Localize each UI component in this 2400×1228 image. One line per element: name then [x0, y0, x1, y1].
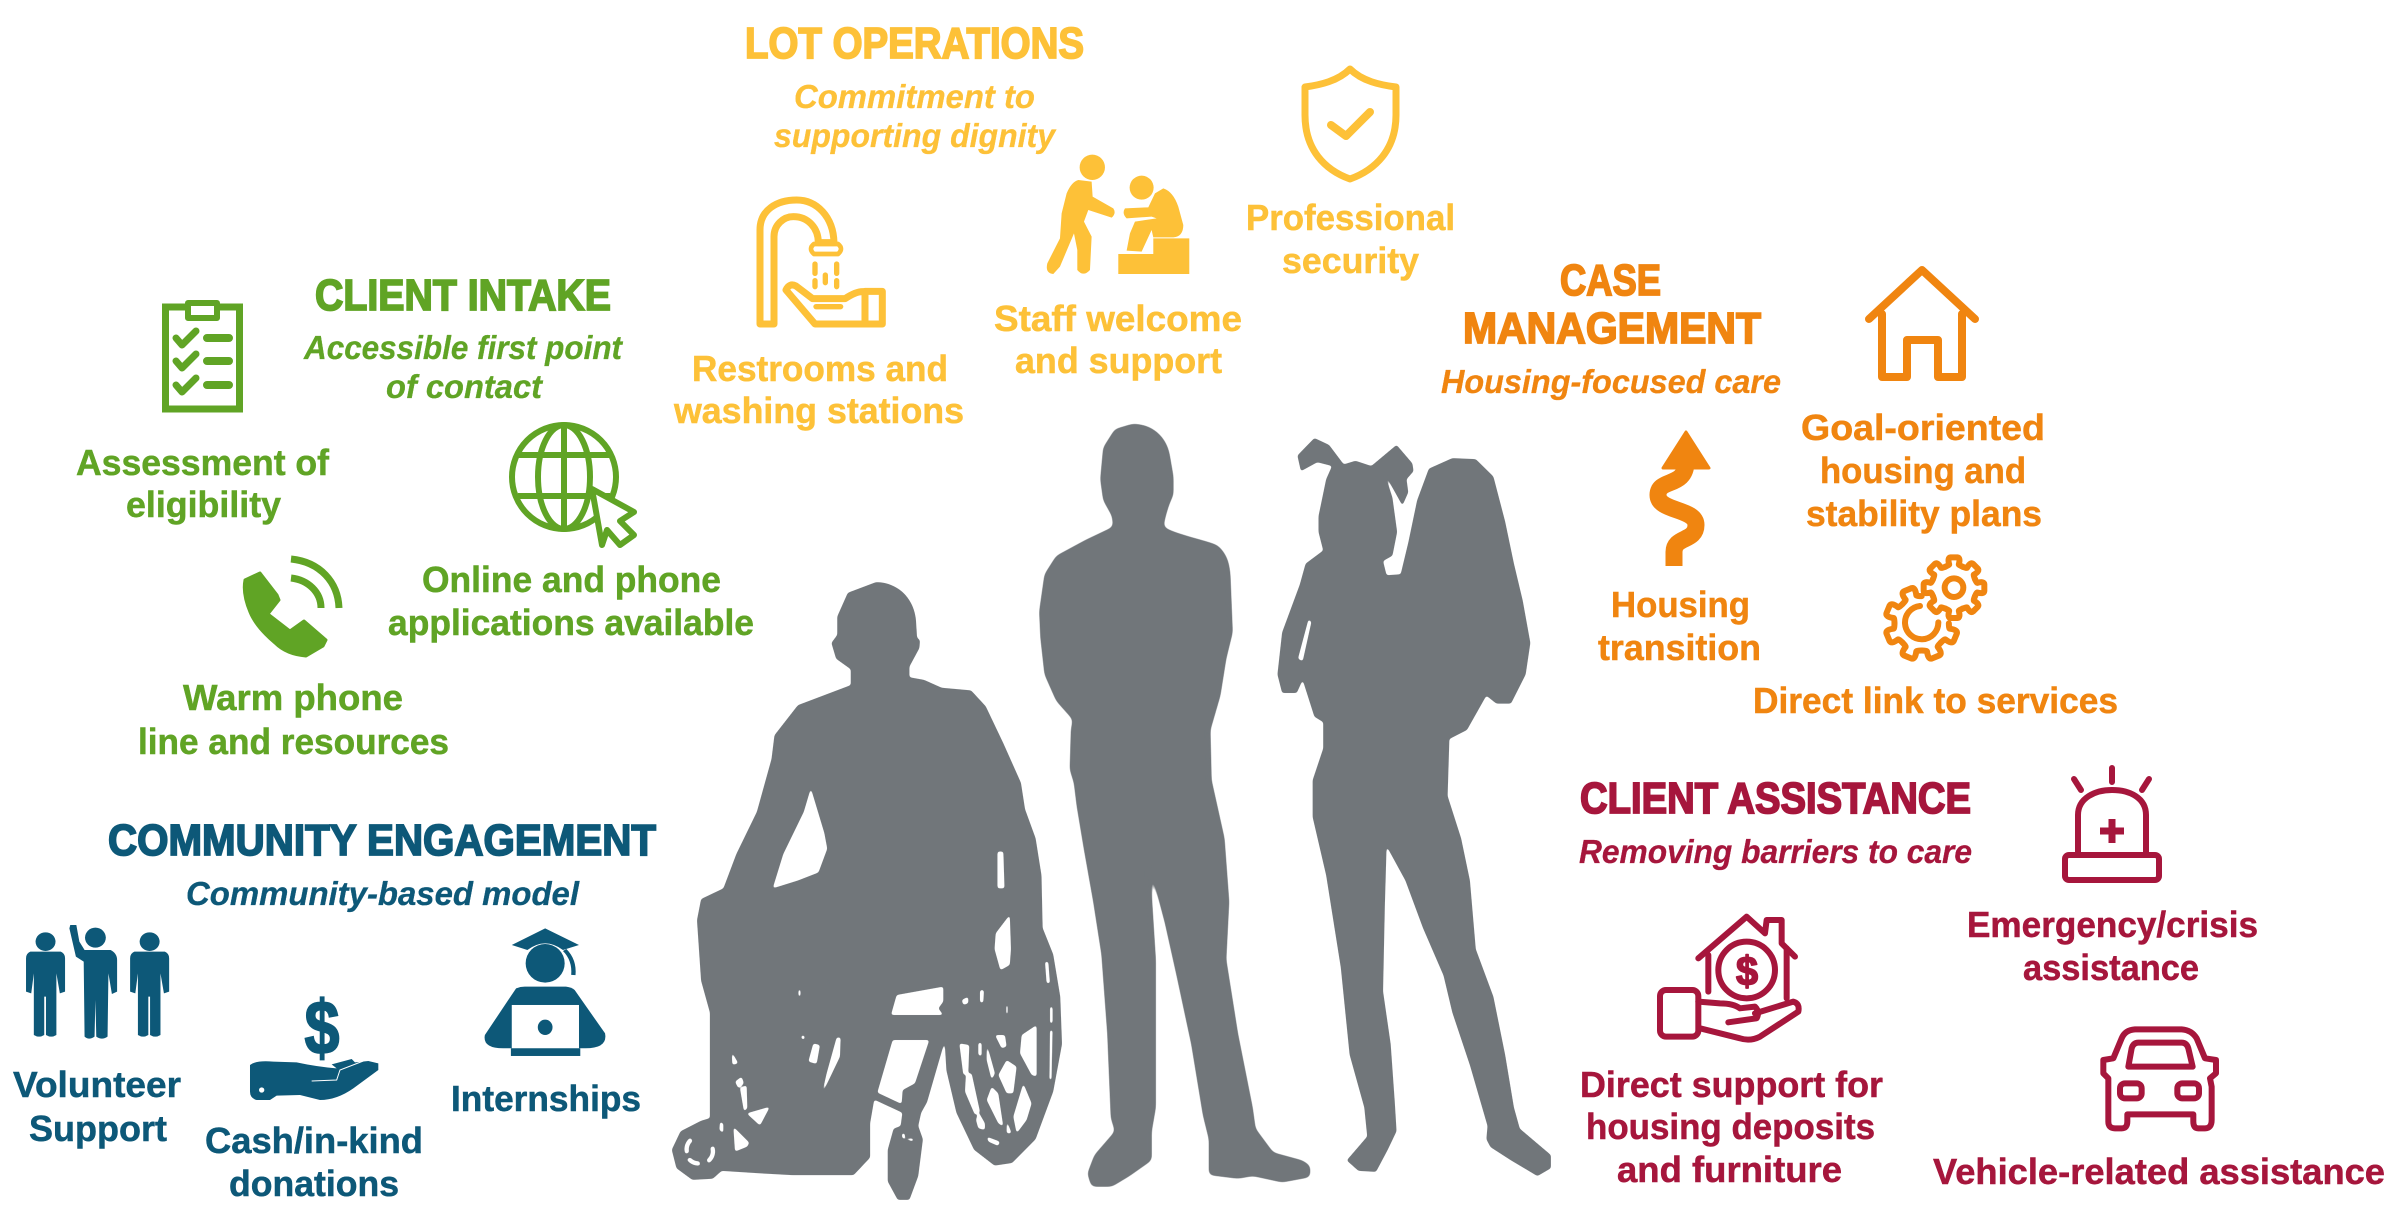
label: warm phone line and resources — [138, 677, 449, 762]
label: assessment of eligibility: Assessment of — [76, 442, 330, 483]
panel: people silhouettes — [672, 424, 1551, 1200]
subheading: commitment to supporting dignity — [774, 78, 1057, 154]
label: online and phone applications available — [388, 559, 754, 643]
heading: case management: CASE — [1560, 256, 1661, 305]
label: professional security: Professional — [1246, 197, 1455, 238]
label: housing transition: transition — [1598, 627, 1761, 668]
icon: security shield — [1305, 69, 1396, 179]
icon: hand holding dollar: $ — [304, 986, 340, 1071]
panel: lot operations — [673, 19, 1455, 431]
silhouette: standing man — [1039, 424, 1310, 1187]
icon: winding arrow — [1658, 432, 1709, 566]
icon: staff supporting seated person — [1047, 155, 1189, 274]
label: volunteer support: Volunteer — [13, 1064, 181, 1105]
label: direct link to services: Direct link to services — [1753, 680, 2118, 721]
label: goal-oriented housing and stability plans: stability plans — [1806, 493, 2042, 534]
label: direct support for housing deposits and furniture: and furniture — [1617, 1149, 1842, 1190]
label: assessment of eligibility — [76, 442, 330, 525]
icon: emergency siren — [2065, 768, 2159, 880]
label: vehicle-related assistance: Vehicle-related assistance — [1933, 1151, 2385, 1192]
icon: house outline — [1869, 270, 1975, 377]
heading: case management — [1463, 256, 1761, 353]
label: housing transition — [1598, 584, 1761, 668]
label: staff welcome and support: Staff welcome — [994, 298, 1242, 339]
label: professional security — [1246, 197, 1455, 281]
label: volunteer support — [13, 1064, 181, 1149]
label: assessment of eligibility: eligibility — [126, 484, 281, 525]
panel: community engagement — [13, 816, 656, 1204]
heading: client assistance: CLIENT ASSISTANCE — [1580, 774, 1971, 823]
heading: case management: MANAGEMENT — [1463, 304, 1761, 353]
label: professional security: security — [1282, 240, 1419, 281]
label: online and phone applications available: Online and phone — [422, 559, 721, 600]
subheading: accessible first point of contact: of contact — [386, 368, 544, 405]
subheading: accessible first point of contact — [303, 329, 624, 405]
silhouette: person in wheelchair — [672, 582, 1062, 1200]
label: online and phone applications available: applications available — [388, 602, 754, 643]
label: warm phone line and resources: line and resources — [138, 721, 449, 762]
subheading: housing-focused care: Housing-focused care — [1441, 363, 1781, 400]
label: warm phone line and resources: Warm phone — [183, 677, 403, 718]
label: cash in-kind donations: Cash/in-kind — [205, 1120, 423, 1161]
icon: hand holding dollar — [250, 986, 378, 1100]
label: goal-oriented housing and stability plans: housing and — [1820, 450, 2026, 491]
label: goal-oriented housing and stability plans — [1801, 407, 2045, 534]
label: cash in-kind donations — [205, 1120, 423, 1204]
icon: clipboard checklist — [166, 303, 240, 409]
label: direct support for housing deposits and furniture: housing deposits — [1586, 1106, 1875, 1147]
icon: car front — [2103, 1029, 2216, 1128]
label: internships: Internships — [451, 1078, 641, 1119]
label: direct support for housing deposits and furniture — [1580, 1064, 1883, 1190]
icon: globe with cursor — [512, 425, 634, 545]
subheading: commitment to supporting dignity: supporting dignity — [774, 117, 1057, 154]
label: staff welcome and support — [994, 298, 1242, 381]
icon: phone with signal waves — [244, 559, 339, 656]
subheading: commitment to supporting dignity: Commitment to — [794, 78, 1035, 115]
label: emergency crisis assistance: assistance — [2023, 947, 2199, 988]
label: cash in-kind donations: donations — [229, 1163, 399, 1204]
icon: house with dollar on hand — [1660, 917, 1799, 1040]
label: restrooms and washing stations — [673, 348, 964, 431]
icon: three volunteers — [26, 925, 169, 1039]
heading: client intake: CLIENT INTAKE — [315, 271, 611, 320]
icon: gears — [1884, 557, 1984, 661]
label: restrooms and washing stations: washing stations — [673, 390, 964, 431]
heading: lot operations: LOT OPERATIONS — [745, 19, 1084, 68]
label: emergency crisis assistance — [1967, 904, 2258, 988]
subheading: accessible first point of contact: Accessible first point — [303, 329, 624, 366]
label: volunteer support: Support — [29, 1108, 167, 1149]
silhouette: woman carrying child — [1277, 438, 1551, 1176]
label: direct support for housing deposits and furniture: Direct support for — [1580, 1064, 1883, 1105]
label: staff welcome and support: and support — [1015, 340, 1222, 381]
icon: faucet and hand — [760, 200, 882, 324]
panel: client intake — [76, 271, 754, 762]
panel: client assistance — [1579, 768, 2385, 1192]
heading: community engagement: COMMUNITY ENGAGEMENT — [108, 816, 656, 865]
label: emergency crisis assistance: Emergency/crisis — [1967, 904, 2258, 945]
subheading: removing barriers to care: Removing barriers to care — [1579, 833, 1972, 870]
icon: house with dollar on hand: $ — [1736, 948, 1758, 994]
icon: graduate at laptop — [485, 928, 605, 1056]
subheading: community-based model: Community-based model — [186, 875, 580, 912]
label: goal-oriented housing and stability plans: Goal-oriented — [1801, 407, 2045, 448]
panel: case management — [1441, 256, 2118, 721]
label: restrooms and washing stations: Restrooms and — [692, 348, 948, 389]
label: housing transition: Housing — [1611, 584, 1750, 625]
